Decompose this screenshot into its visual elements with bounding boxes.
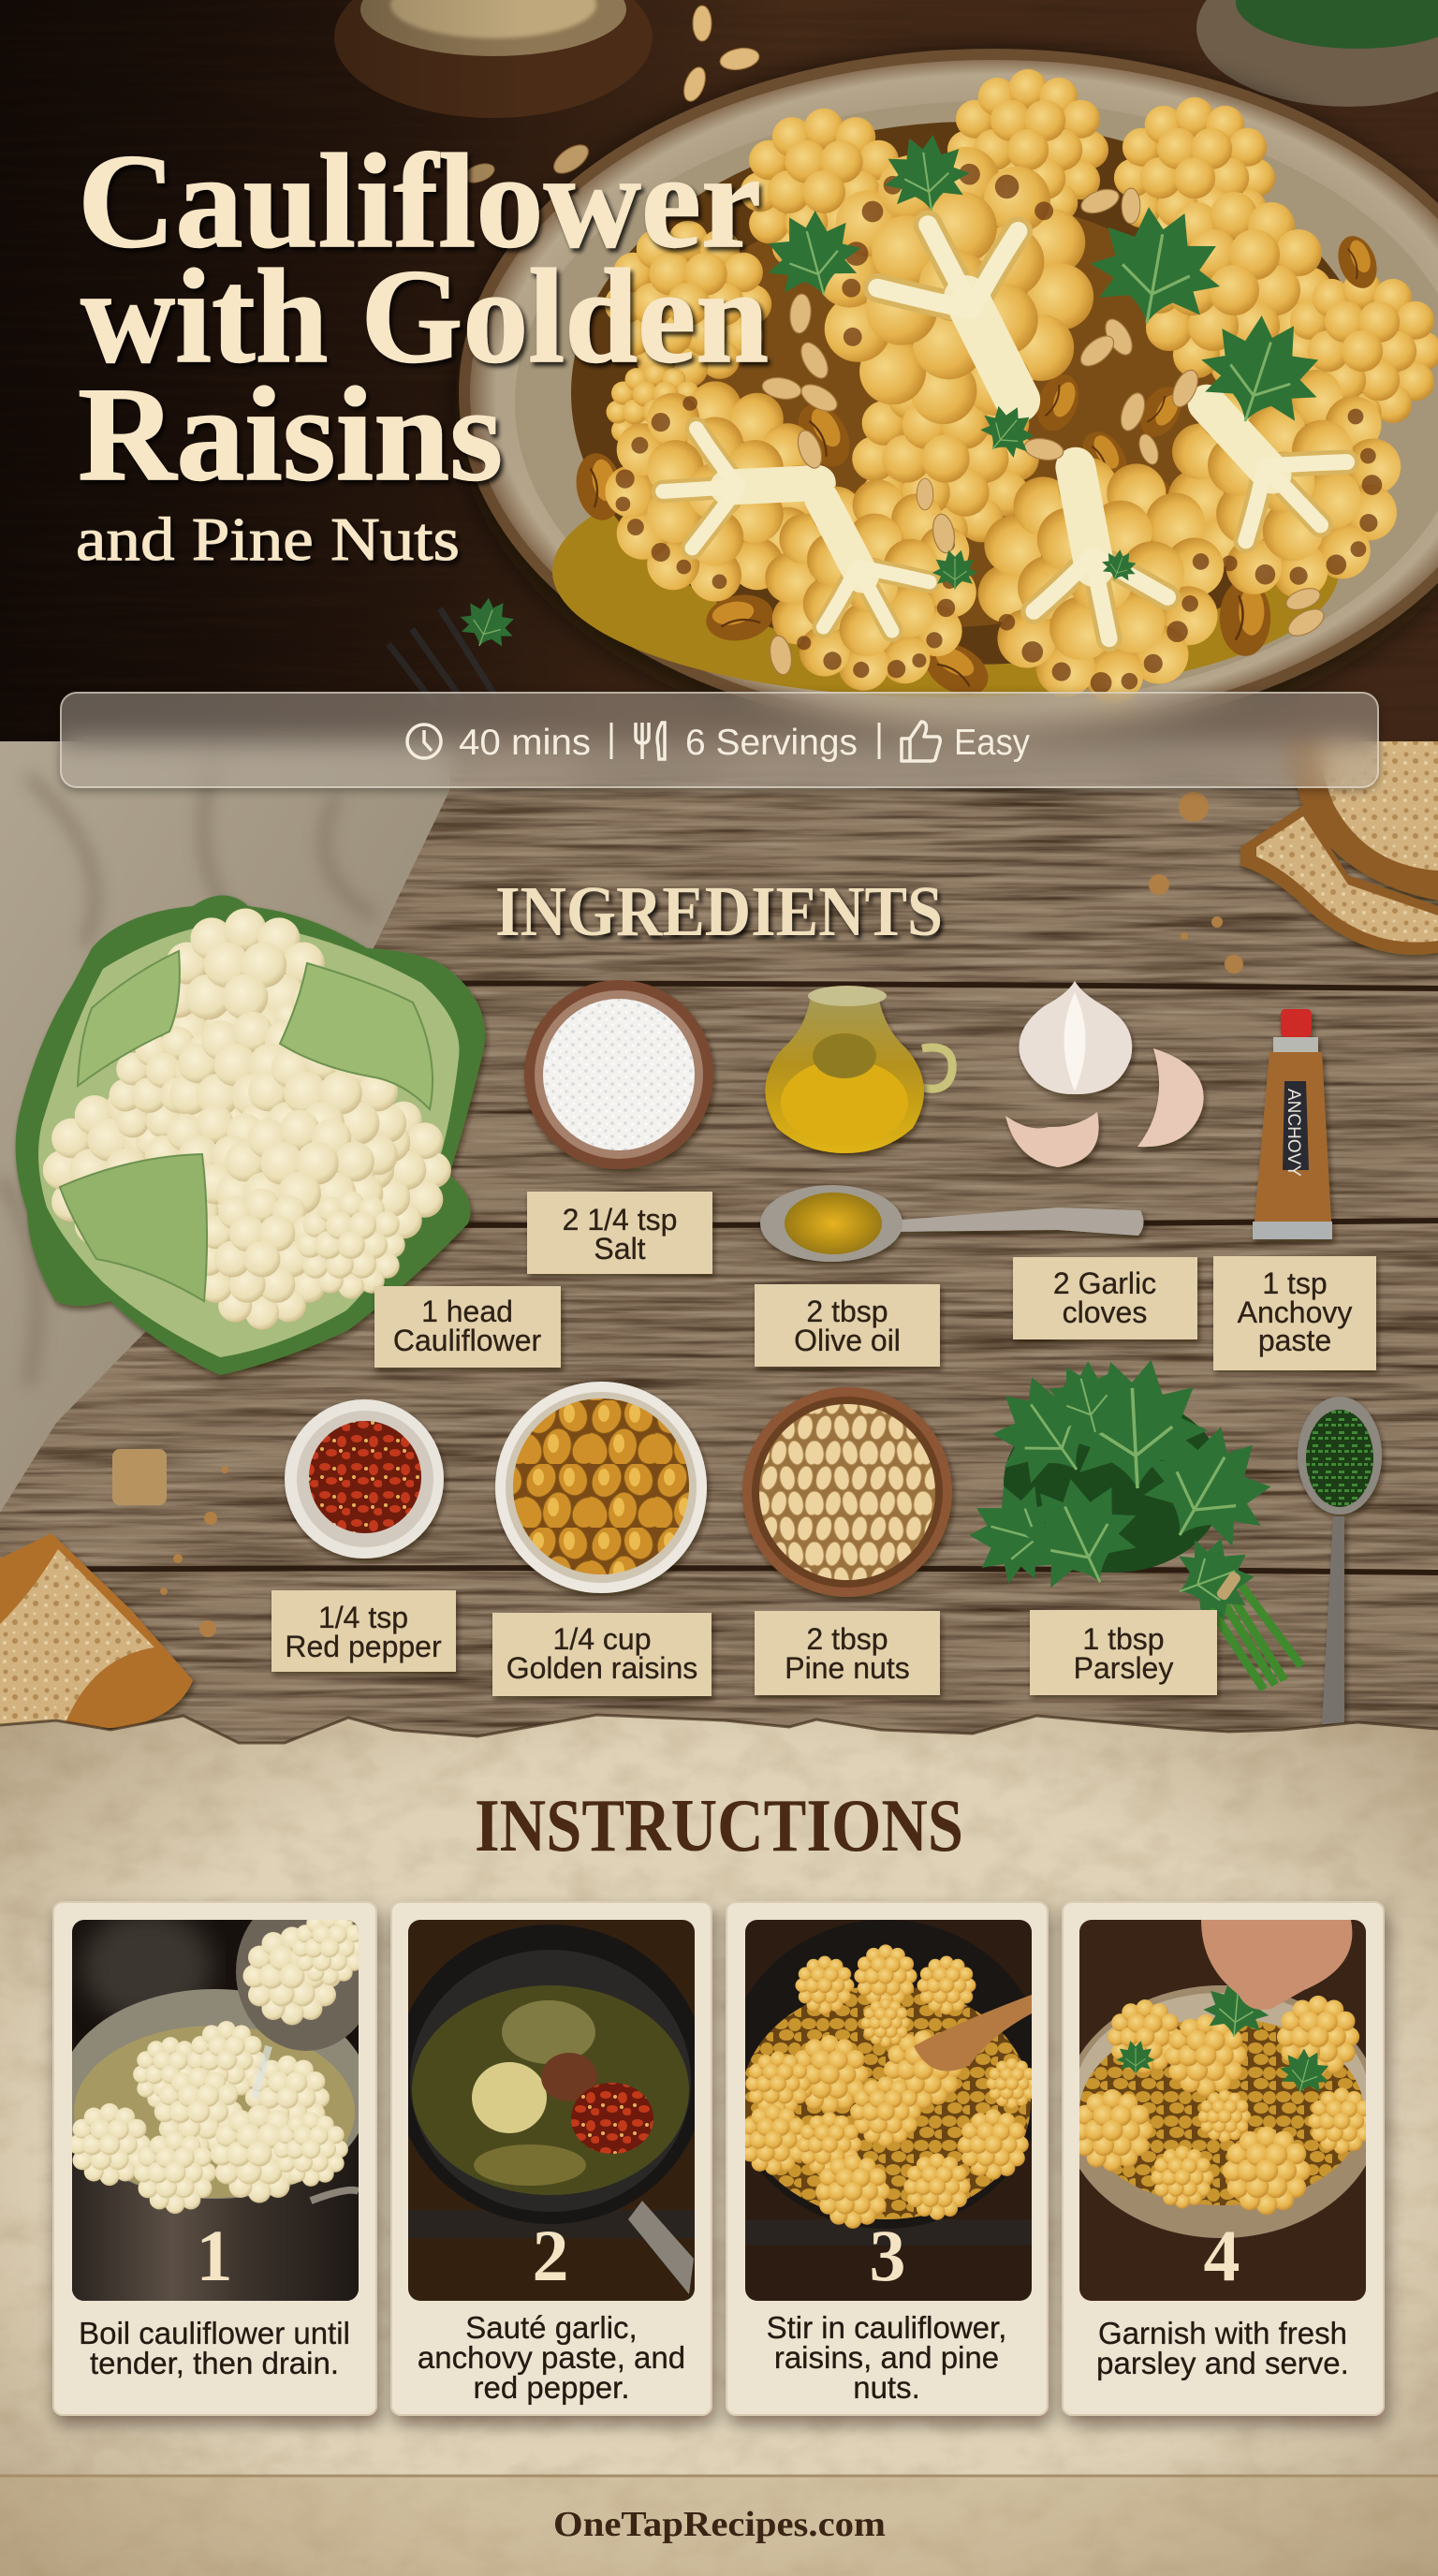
icon: pine nuts bowl	[742, 1387, 952, 1597]
title: and Pine Nuts	[76, 505, 460, 574]
ingredient label: olive oil	[755, 1284, 940, 1367]
step 4 caption	[1096, 2316, 1349, 2380]
step 4 caption: parsley and serve.	[1096, 2346, 1349, 2380]
ingredient label: anchovy paste: paste	[1258, 1324, 1331, 1357]
ingredient label: golden raisins	[492, 1613, 712, 1696]
back florets	[605, 69, 1438, 552]
step 3 caption: raisins, and pine	[774, 2340, 999, 2375]
ingredient label: cauliflower	[374, 1286, 561, 1368]
stray parsley	[453, 591, 522, 655]
step 2 caption: red pepper.	[474, 2370, 629, 2405]
step 1 caption	[79, 2316, 350, 2380]
step 2 image: pan with oil and aromatics: 2	[532, 2215, 569, 2296]
ingredient label: salt: 2 1/4 tsp	[563, 1203, 677, 1237]
icon: thumbs up	[902, 722, 940, 761]
crumbs	[112, 792, 1243, 1637]
ingredient label: olive oil: 2 tbsp	[806, 1295, 888, 1328]
background bowl of greens	[1196, 0, 1438, 107]
ingredient label: red pepper: 1/4 tsp	[318, 1601, 408, 1634]
icon: red pepper bowl	[285, 1399, 444, 1559]
front florets with stems	[605, 101, 1438, 726]
footer text: OneTapRecipes.com	[553, 2505, 886, 2544]
ingredient label: anchovy paste	[1213, 1256, 1376, 1370]
ingredient label: anchovy paste: 1 tsp	[1262, 1266, 1328, 1300]
title: Cauliflower	[78, 127, 761, 276]
ingredient label: parsley	[1030, 1610, 1217, 1695]
step 3 caption: Stir in cauliflower,	[767, 2310, 1006, 2345]
time: 40 mins	[459, 723, 591, 763]
difficulty: Easy	[954, 723, 1030, 763]
ingredient label: cauliflower: 1 head	[421, 1295, 513, 1328]
step card 4	[1063, 1902, 1384, 2415]
icon: spoon of chopped parsley	[1298, 1397, 1382, 1724]
icon: whole cauliflower	[16, 895, 485, 1375]
separator	[878, 723, 880, 759]
ingredient label: olive oil: Olive oil	[794, 1324, 901, 1357]
separator	[610, 723, 612, 759]
icon: salt bowl	[524, 980, 713, 1169]
step 3 image: stirring in the pan	[725, 1920, 1047, 2301]
fork	[386, 607, 496, 692]
step 2 image: pan with oil and aromatics	[395, 1920, 706, 2301]
linen cloth	[0, 741, 451, 1513]
step 4 image: garnished bowl: 4	[1204, 2215, 1240, 2296]
ingredient label: red pepper	[271, 1590, 456, 1672]
parsley leaves	[756, 130, 1335, 590]
ingredient label: parsley: 1 tbsp	[1082, 1622, 1165, 1656]
info bar: time, servings, difficulty	[60, 692, 1379, 788]
ingredient label: parsley: Parsley	[1074, 1651, 1173, 1685]
ingredient label: salt: Salt	[594, 1232, 646, 1266]
ingredient label: garlic	[1013, 1257, 1197, 1339]
icon: garlic	[1005, 981, 1204, 1167]
step 1 image: boiling pot	[59, 1892, 376, 2301]
panel: instructions parchment	[0, 1708, 1438, 2576]
icon: loaf bottom left	[0, 1533, 193, 1728]
icon: clock	[407, 724, 441, 758]
hero photo: roasted cauliflower plate	[0, 0, 1438, 756]
icon: utensils	[636, 723, 665, 759]
step 3 caption	[767, 2310, 1006, 2405]
ingredient label: red pepper: Red pepper	[285, 1630, 442, 1663]
ingredient label: garlic: 2 Garlic	[1053, 1266, 1156, 1300]
ingredient label: pine nuts	[755, 1611, 940, 1695]
step 2 caption	[418, 2310, 685, 2405]
food mass	[552, 122, 1376, 697]
raisins on plate	[571, 230, 1384, 706]
title: with Golden	[81, 242, 769, 391]
ingredient label: anchovy paste: Anchovy	[1238, 1295, 1352, 1329]
icon: golden raisins bowl	[495, 1382, 707, 1593]
heading: instructions: INSTRUCTIONS	[475, 1785, 963, 1867]
step card 2	[391, 1902, 712, 2415]
title: Raisins	[78, 360, 503, 509]
servings: 6 Servings	[685, 723, 858, 763]
bread slices top right	[1240, 741, 1438, 955]
background bowl of pine nuts	[334, 0, 653, 118]
step 2 caption: anchovy paste, and	[418, 2340, 685, 2375]
step card 1	[53, 1892, 376, 2415]
pine nuts on plate	[462, 6, 1328, 677]
ingredient label: garlic: cloves	[1063, 1295, 1147, 1329]
step 1 caption: Boil cauliflower until	[79, 2316, 350, 2350]
step 2 caption: Sauté garlic,	[465, 2310, 638, 2345]
step 1 image: boiling pot: 1	[197, 2215, 232, 2296]
ingredient label: pine nuts: 2 tbsp	[806, 1622, 888, 1656]
icon: parsley bunch	[960, 1354, 1301, 1690]
step 1 caption: tender, then drain.	[90, 2346, 339, 2380]
step 3 caption: nuts.	[853, 2370, 920, 2405]
panel: ingredients	[0, 741, 1438, 1752]
heading: ingredients: INGREDIENTS	[495, 872, 943, 951]
icon: anchovy tube: ANCHOVY	[1284, 1089, 1303, 1177]
ingredient label: cauliflower: Cauliflower	[393, 1324, 541, 1357]
step 4 image: garnished bowl	[1063, 1920, 1381, 2301]
ingredient label: golden raisins: 1/4 cup	[553, 1622, 651, 1656]
icon: olive oil jug	[765, 986, 952, 1153]
step 4 caption: Garnish with fresh	[1098, 2316, 1347, 2350]
plate	[455, 49, 1438, 756]
title	[76, 127, 769, 574]
ingredient label: salt	[527, 1192, 712, 1274]
ingredient label: pine nuts: Pine nuts	[785, 1651, 910, 1685]
step card 3	[725, 1902, 1048, 2415]
icon: oil spoon	[760, 1185, 1144, 1262]
ingredient label: golden raisins: Golden raisins	[506, 1651, 697, 1685]
step 3 image: stirring in the pan: 3	[869, 2215, 906, 2296]
icon: anchovy tube	[1253, 1009, 1332, 1239]
footer band	[0, 2476, 1438, 2576]
